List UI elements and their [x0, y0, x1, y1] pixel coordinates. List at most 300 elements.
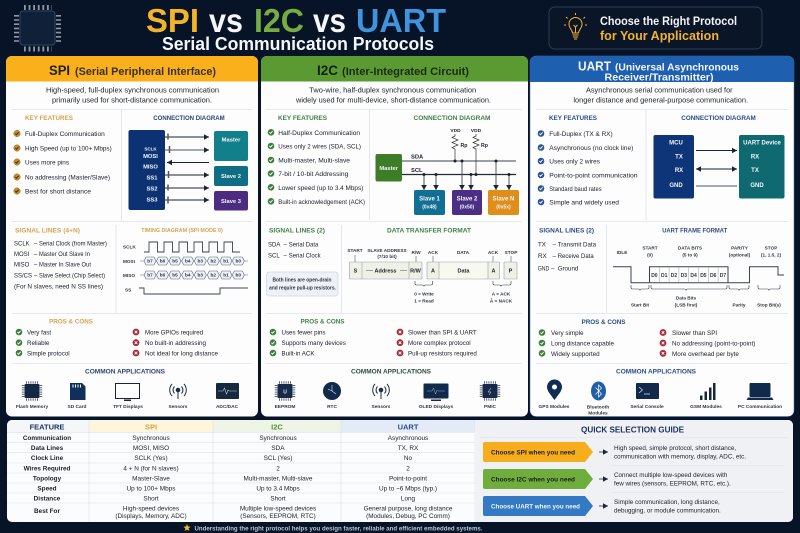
I2C key features: Half-Duplex Communication	[278, 130, 360, 137]
field labels: (7/10 bit)	[377, 254, 397, 259]
timing labels: MOSI	[123, 259, 135, 264]
MISO waveform: b2	[211, 273, 216, 278]
UART signal lines: TX	[538, 242, 546, 248]
feature column: Distance	[34, 495, 61, 502]
I2C column: 2	[276, 465, 280, 472]
frame notes: 0 = Write	[414, 292, 434, 296]
SPI pros and cons: No built-in addressing	[145, 340, 207, 347]
SPI master block: SS1	[147, 176, 158, 182]
UART frame format	[613, 228, 784, 308]
UART signal lines: –	[551, 266, 555, 272]
I2C header: I2C	[317, 63, 338, 78]
SPI column: MOSI, MISO	[133, 445, 169, 452]
icon: PMIC	[481, 382, 499, 410]
UART key features: Point-to-point communication	[549, 172, 638, 180]
SPI pros and cons: Simple protocol	[27, 350, 70, 358]
feature column: Topology	[33, 475, 62, 482]
I2C guide row: few wires (sensors, EEPROM, RTC, etc.).	[614, 480, 731, 488]
I2C signal lines	[268, 228, 325, 260]
SPI header: SPI	[49, 63, 70, 78]
SPI column: High-speed devices	[123, 506, 179, 512]
icon: RTC clock: RTC	[327, 404, 337, 410]
frame fields: R/W	[410, 268, 422, 274]
UART frame format: UART FRAME FORMAT	[662, 228, 727, 234]
UART header: Receiver/Transmitter)	[604, 72, 714, 84]
I2C pros and cons: Pull-up resistors required	[408, 350, 477, 358]
I2C signal lines: SDA	[268, 242, 280, 248]
SPI key features: No addressing (Master/Slave)	[25, 174, 110, 182]
UART guide row: Choose UART when you need	[491, 504, 580, 510]
timing labels: SCLK	[123, 244, 136, 250]
icon: PMIC: PMIC	[484, 404, 497, 410]
frame notes: Ā = NACK	[490, 298, 513, 304]
SPI guide row: communication with memory, display, ADC, etc.	[614, 454, 746, 460]
I2C guide row	[483, 469, 731, 489]
frame labels: START	[642, 246, 658, 250]
I2C pull-up note	[266, 272, 338, 296]
UART connection diagram: CONNECTION DIAGRAM	[681, 115, 756, 122]
SPI connection diagram	[128, 115, 248, 210]
UART signal lines: Transmit Data	[558, 242, 597, 248]
frame labels: (5 to 9)	[682, 252, 698, 258]
SPI column: 4 + N (for N slaves)	[123, 465, 179, 472]
UART device block: GND	[750, 183, 764, 189]
SPI pros and cons: Very fast	[27, 330, 51, 336]
SPI signal lines: SS/CS	[14, 274, 32, 280]
SPI description	[46, 86, 219, 104]
UART signal lines: Receive Data	[558, 253, 594, 260]
icon: microchip	[16, 8, 58, 49]
I2C pros and cons: Slower than SPI & UART	[408, 330, 477, 336]
UART column: No	[404, 455, 413, 462]
MISO waveform: b6	[160, 273, 166, 278]
UART pros and cons: Very simple	[551, 330, 584, 337]
icon: EEPROM: EEPROM	[275, 404, 295, 410]
title	[146, 2, 446, 54]
UART guide row: Simple communication, long distance,	[614, 499, 720, 506]
icon: laptop	[738, 383, 782, 410]
icon: Bluetooth: Modules	[588, 410, 608, 416]
table header: I2C	[271, 422, 283, 431]
panel: I2C	[261, 56, 528, 416]
UART description	[573, 86, 748, 104]
SPI timing diagram	[123, 228, 248, 294]
SPI timing diagram: TIMING DIAGRAM (SPI MODE 0)	[141, 228, 223, 234]
timing labels	[123, 244, 136, 292]
icon: EEPROM	[275, 382, 295, 410]
UART key features: Uses only 2 wires	[549, 158, 600, 166]
UART header: UART	[578, 60, 611, 74]
I2C description: widely used for multi-device, short-distance communication.	[295, 96, 491, 104]
I2C pros and cons: PROS & CONS	[300, 318, 344, 326]
UART pros and cons: Slower than SPI	[672, 330, 717, 337]
frame fields: S	[354, 268, 358, 274]
frame labels: (1, 1.5, 2)	[761, 252, 781, 258]
I2C pros and cons: Supports many devices	[282, 340, 346, 347]
SPI guide row: High speed, simple protocol, short distance,	[614, 445, 736, 452]
UART column: (Modules, Debug, PC Comm)	[366, 513, 450, 520]
I2C slaves: (0x5x)	[496, 204, 511, 210]
title: I2C	[254, 2, 304, 39]
title: vs	[313, 2, 346, 39]
UART column: TX, RX	[398, 445, 419, 452]
frame notes	[414, 281, 513, 304]
SPI signal lines: Serial Clock (from Master)	[39, 242, 107, 248]
SCLK waveform	[144, 242, 240, 252]
I2C wire labels: VDD	[450, 128, 461, 134]
I2C data transfer format	[347, 228, 517, 304]
UART key features: Standard baud rates	[549, 186, 602, 193]
SPI signal lines	[14, 228, 107, 290]
MOSI waveform: b6	[160, 259, 166, 264]
quick selection guide: QUICK SELECTION GUIDE	[581, 424, 684, 434]
I2C pros and cons: More complex protocol	[408, 340, 471, 347]
I2C pros and cons: Built-in ACK	[282, 350, 315, 358]
UART signal lines	[538, 228, 597, 272]
data bits: D0	[651, 273, 658, 279]
title: UART	[356, 2, 446, 39]
UART column: Asynchronous	[388, 435, 428, 442]
MOSI waveform: b2	[211, 259, 216, 264]
icon: OLED display	[419, 384, 454, 410]
I2C key features	[268, 115, 365, 206]
quick selection guide	[475, 420, 793, 522]
frame brackets: (LSB first)	[675, 302, 698, 308]
UART header	[530, 56, 794, 84]
I2C slaves: Slave 2	[457, 196, 478, 202]
SPI signal lines: –	[34, 274, 38, 280]
I2C connection diagram: CONNECTION DIAGRAM	[414, 115, 490, 122]
UART column: 2	[406, 465, 410, 472]
SPI pros and cons	[16, 318, 219, 358]
I2C column: SDA	[271, 445, 285, 452]
I2C slaves: Slave N	[493, 196, 514, 202]
I2C wire labels	[411, 128, 488, 174]
UART column: General purpose, long distance	[364, 506, 453, 512]
SPI column: Synchronous	[132, 435, 170, 442]
SPI pros and cons: PROS & CONS	[49, 318, 93, 326]
UART column: Point-to-point	[389, 475, 427, 482]
feature column: Best For	[34, 508, 60, 515]
I2C signal lines: Serial Clock	[289, 254, 322, 260]
I2C master: Master	[379, 166, 399, 172]
field labels: DATA	[457, 250, 470, 255]
I2C wire labels: Rp	[481, 143, 488, 149]
I2C column: Multiple low-speed devices	[240, 506, 316, 512]
data bits: D3	[681, 273, 687, 279]
SPI key features: Best for short distance	[25, 188, 91, 196]
UART column: Long	[401, 495, 416, 502]
frame notes: A = ACK	[492, 292, 511, 296]
I2C header	[261, 56, 528, 82]
panel: SPI	[6, 56, 258, 416]
SPI signal lines: Master Out Slave In	[39, 252, 90, 258]
I2C slaves	[414, 190, 519, 215]
feature column: Communication	[23, 435, 71, 442]
table header: UART	[398, 422, 419, 431]
frame labels: (optional)	[729, 252, 751, 258]
feature column: Speed	[37, 485, 57, 492]
MISO waveform: b1	[223, 273, 229, 278]
I2C slaves: (0x50)	[460, 204, 475, 210]
UART description: longer distance and general-purpose communication.	[573, 96, 748, 104]
I2C wire labels: Rp	[460, 143, 467, 149]
I2C header: (Inter-Integrated Circuit)	[342, 66, 469, 78]
UART header: (Universal Asynchronous	[615, 62, 739, 74]
UART device block: RX	[751, 154, 759, 160]
I2C signal lines: Serial Data	[289, 242, 319, 248]
UART key features: Simple and widely used	[549, 200, 619, 206]
SS waveform	[139, 288, 248, 294]
panel: UART	[530, 56, 794, 416]
I2C key features: KEY FEATURES	[278, 115, 327, 122]
frame labels: IDLE	[617, 250, 627, 255]
frame fields: P	[509, 268, 513, 274]
field labels: ACK	[488, 250, 499, 255]
SPI column: Up to 100+ Mbps	[127, 485, 175, 492]
SPI description: High-speed, full-duplex synchronous communication	[46, 86, 219, 94]
UART MCU block: MCU	[669, 140, 683, 146]
I2C description: Two-wire, half-duplex synchronous communication	[309, 86, 476, 94]
feature column: Data Lines	[31, 445, 64, 452]
UART common applications: COMMON APPLICATIONS	[616, 368, 696, 376]
callout: choose the right protocol: Choose the Right Protocol	[600, 14, 737, 28]
SPI header: (Serial Peripheral Interface)	[75, 66, 216, 78]
UART pros and cons: Long distance capable	[551, 340, 615, 348]
icon: antenna sensor	[169, 384, 188, 410]
I2C pros and cons: Uses fewer pins	[282, 330, 326, 336]
UART MCU block	[654, 135, 694, 198]
MOSI waveform	[140, 257, 248, 265]
frame labels: (0)	[647, 252, 653, 258]
SPI signal lines: (For N slaves, need N SS lines)	[14, 284, 103, 290]
frame waveform	[613, 267, 784, 283]
SPI common applications	[16, 368, 239, 410]
feature column: Clock Line	[31, 455, 64, 462]
SPI header	[6, 56, 258, 82]
MOSI waveform: b4	[185, 259, 191, 264]
UART device block	[739, 135, 784, 198]
icon: GSM signal: GSM Modules	[690, 404, 722, 410]
I2C guide row: Choose I2C when you need	[491, 476, 575, 484]
data bits: D6	[710, 273, 717, 279]
UART guide row: debugging, or module communication.	[614, 508, 721, 514]
field labels: ACK	[428, 250, 439, 255]
frame brackets: Parity	[732, 302, 746, 308]
icon: GSM signal	[690, 383, 722, 410]
UART signal lines: –	[552, 242, 556, 248]
feature column: Wires Required	[24, 465, 71, 472]
I2C column: Synchronous	[259, 435, 297, 442]
SPI signal lines: –	[34, 252, 38, 258]
SPI guide row: Choose SPI when you need	[491, 450, 575, 456]
icon: antenna sensor: Sensors	[372, 404, 391, 410]
frame fields: Data	[458, 268, 470, 274]
UART column: Up to ~6 Mbps (typ.)	[379, 485, 437, 492]
icon: TFT display: TFT Displays	[113, 404, 143, 410]
UART pros and cons	[539, 319, 755, 358]
I2C key features: Built-in acknowledgement (ACK)	[278, 199, 365, 206]
I2C column	[240, 435, 316, 520]
icon: antenna sensor: Sensors	[169, 404, 188, 410]
UART guide row	[483, 496, 721, 516]
I2C signal lines: –	[284, 254, 288, 260]
SPI signal lines: SCLK	[14, 242, 30, 248]
frame brackets: Stop Bit(s)	[757, 302, 781, 308]
SPI description: primarily used for short-distance communication.	[52, 96, 212, 104]
SPI guide row	[483, 442, 746, 462]
icon: Bluetooth	[587, 382, 609, 416]
MOSI waveform: b3	[198, 259, 203, 264]
title: vs	[209, 2, 243, 39]
MISO waveform: b7	[147, 273, 153, 278]
data bits: D4	[690, 273, 697, 279]
UART description: Asynchronous serial communication used for	[586, 86, 733, 94]
callout: choose the right protocol: for Your Application	[600, 28, 719, 43]
icon: serial console	[630, 383, 664, 410]
icon: RTC clock	[323, 382, 341, 410]
SPI wires	[165, 134, 209, 204]
SPI column: Master-Slave	[132, 475, 170, 482]
icon: antenna sensor	[372, 384, 391, 410]
table header: SPI	[145, 422, 157, 431]
SPI slave blocks: Slave 3	[221, 199, 242, 205]
footer note: Understanding the right protocol helps you design faster, reliable and efficient embedded systems.	[194, 526, 483, 532]
UART key features: Asynchronous (no clock line)	[549, 145, 633, 152]
SPI master block: MISO	[143, 164, 158, 170]
SPI common applications: COMMON APPLICATIONS	[85, 368, 165, 376]
I2C slaves: (0x48)	[422, 204, 437, 210]
frame fields	[350, 261, 517, 280]
MOSI waveform: b7	[147, 259, 153, 264]
MOSI waveform: b0	[236, 259, 241, 264]
MOSI waveform: b5	[172, 259, 178, 264]
I2C signal lines: SCL	[268, 254, 280, 260]
SPI slave blocks	[214, 131, 248, 210]
SPI master block: SCLK	[144, 146, 157, 152]
SPI signal lines: Master In Slave Out	[39, 262, 91, 268]
SPI signal lines: Slave Select (Chip Select)	[39, 274, 105, 280]
I2C key features: Lower speed (up to 3.4 Mbps)	[278, 185, 363, 192]
MISO waveform: b0	[236, 273, 241, 278]
SPI column	[115, 435, 187, 520]
MISO waveform: b4	[185, 273, 191, 278]
frame labels: PARITY	[731, 246, 749, 250]
UART signal lines: RX	[538, 253, 547, 260]
frame brackets: Data Bits	[676, 296, 697, 300]
timing labels: SS	[125, 288, 131, 292]
I2C bus wires	[402, 134, 516, 190]
UART signal lines: Ground	[558, 266, 579, 272]
I2C pull-up note: Both lines are open-drain	[272, 278, 332, 284]
I2C wire labels: SDA	[411, 154, 424, 160]
icon: ADC DAC	[216, 383, 239, 410]
I2C column: SCL (Yes)	[264, 455, 292, 462]
SPI column: (Displays, Memory, ADC)	[115, 513, 187, 520]
SPI slave blocks: Master	[222, 138, 241, 144]
I2C key features: Multi-master, Multi-slave	[278, 158, 350, 164]
SPI master block: SS3	[147, 198, 158, 204]
icon: light bulb	[564, 13, 587, 39]
UART device block: UART Device	[743, 140, 781, 146]
title: SPI	[146, 2, 199, 39]
UART MCU block: GND	[669, 183, 683, 189]
UART MCU block: TX	[675, 154, 683, 160]
SPI key features: Full-Duplex Communication	[25, 131, 105, 138]
feature column	[23, 435, 71, 515]
UART key features: KEY FEATURES	[549, 115, 597, 122]
UART pros and cons: Widely supported	[551, 351, 600, 358]
frame notes: 1 = Read	[414, 298, 434, 304]
I2C signal lines: SIGNAL LINES (2)	[269, 228, 325, 234]
UART column	[364, 435, 453, 520]
SPI column: Short	[143, 495, 159, 502]
SPI signal lines: MOSI	[14, 252, 30, 258]
icon: TFT display	[113, 384, 143, 410]
UART key features	[538, 115, 638, 206]
field labels: STOP	[505, 250, 517, 255]
icon: SD card: SD Card	[68, 404, 87, 410]
I2C column: Multi-master, Multi-slave	[244, 475, 313, 482]
table header: FEATURE	[30, 422, 64, 431]
icon: flash memory	[16, 382, 48, 410]
icon: EEPROM: U	[283, 390, 287, 396]
table header	[7, 420, 475, 432]
SPI key features: KEY FEATURES	[25, 115, 73, 122]
I2C key features: 7-bit / 10-bit Addressing	[278, 171, 349, 178]
SPI column: SCLK (Yes)	[134, 455, 168, 462]
I2C wire labels: SCL	[411, 168, 423, 174]
UART pros and cons: PROS & CONS	[582, 319, 626, 326]
SPI master block	[128, 130, 165, 210]
frame fields: A	[492, 268, 496, 274]
I2C column: Up to 3.4 Mbps	[256, 485, 300, 492]
MISO waveform: b5	[172, 273, 178, 278]
UART key features: Full-Duplex (TX & RX)	[549, 131, 613, 138]
I2C master	[376, 154, 402, 182]
MISO waveform: b3	[198, 273, 203, 278]
UART pros and cons: No addressing (point-to-point)	[672, 340, 755, 348]
SPI signal lines: SIGNAL LINES (4+N)	[15, 228, 80, 234]
frame brackets	[631, 285, 781, 308]
I2C wire labels: VDD	[471, 128, 482, 134]
I2C connection diagram	[376, 115, 519, 215]
I2C common applications	[275, 368, 499, 410]
frame labels: STOP	[765, 246, 777, 250]
comparison table	[7, 420, 475, 522]
I2C data transfer format: DATA TRANSFER FORMAT	[387, 228, 471, 234]
icon: flash memory: Flash Memory	[16, 404, 48, 410]
SPI key features	[14, 115, 112, 196]
icon: ADC DAC: ADC/DAC	[216, 404, 239, 410]
SPI key features: High Speed (up to 100+ Mbps)	[25, 146, 112, 152]
data bits: D7	[720, 273, 726, 279]
field labels: SLAVE ADDRESS	[367, 248, 407, 253]
field labels: R/W	[411, 250, 421, 255]
SPI connection diagram: CONNECTION DIAGRAM	[153, 115, 225, 122]
frame fields: Address	[374, 268, 397, 274]
SPI pros and cons: More GPIOs required	[145, 330, 204, 336]
SPI pros and cons: Not ideal for long distance	[145, 350, 219, 358]
UART pros and cons: More overhead per byte	[672, 351, 739, 358]
field labels: START	[347, 248, 363, 253]
SPI master block: SS2	[147, 186, 157, 192]
I2C signal lines: –	[284, 242, 288, 248]
UART signal lines: GND	[538, 266, 550, 272]
callout: choose the right protocol	[549, 7, 762, 49]
I2C description	[295, 86, 491, 104]
MISO waveform	[140, 271, 248, 279]
